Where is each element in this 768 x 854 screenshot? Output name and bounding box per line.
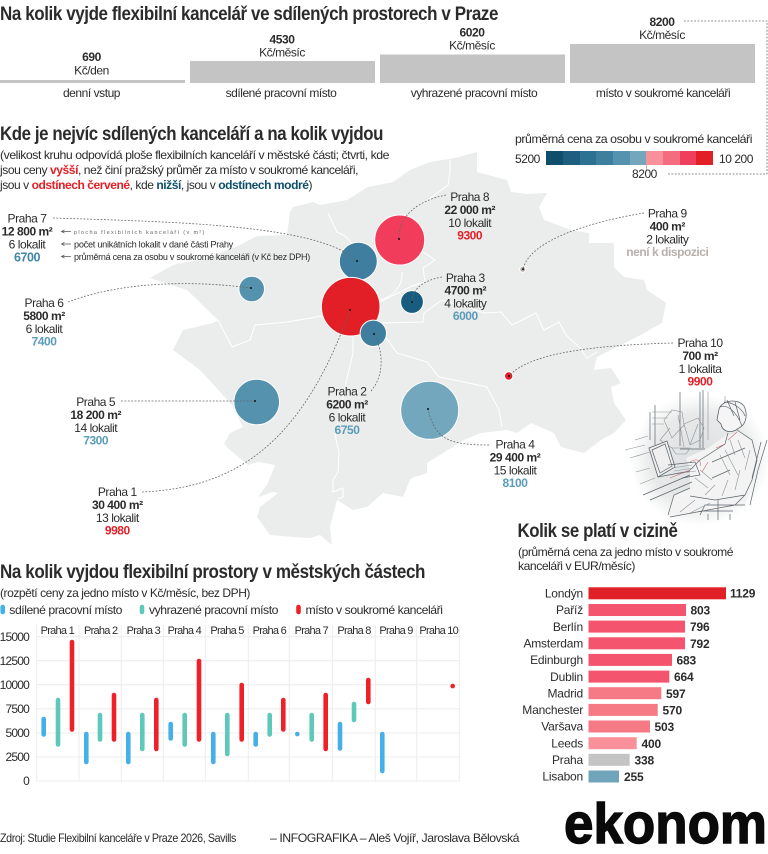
label: Praha 6: 7400 (32, 334, 57, 348)
map intro text: jsou ceny vyšší, než činí pražský průměr za místo v soukromé kanceláři, (0, 163, 358, 177)
bar chart: foreign prices: Edinburgh (530, 653, 583, 667)
bar chart: foreign prices: 400 (642, 737, 661, 751)
bar chart: foreign prices: 597 (666, 687, 686, 701)
window and plant (650, 390, 725, 454)
label: Praha 2: Praha 2 (328, 384, 367, 398)
column headers: Praha 9 (379, 625, 413, 637)
price comparison bars (0, 15, 755, 100)
label: Praha 7: 12 800 m² (2, 224, 53, 238)
label: Praha 4: Praha 4 (496, 438, 535, 452)
column headers: Praha 1 (41, 625, 75, 637)
heading: range chart: Na kolik vyjdou flexibilní prostory v městských částech (0, 562, 425, 583)
bar chart: foreign prices: 570 (662, 704, 682, 718)
y axis: 2500 (6, 750, 30, 764)
y axis: 15000 (0, 630, 30, 644)
bar chart: foreign prices: 503 (654, 720, 674, 734)
label: Praha 10: Praha 10 (677, 336, 723, 350)
bar chart: foreign prices: Varšava (541, 720, 584, 734)
bar chart: foreign prices: Madrid (548, 686, 583, 700)
column headers: Praha 6 (253, 625, 287, 637)
label: Praha 2: 6200 m² (326, 397, 368, 411)
chair (703, 440, 767, 520)
bar chart: foreign prices: 255 (624, 770, 644, 784)
grid (36, 625, 460, 781)
label: Praha 3: 4 lokality (444, 297, 487, 311)
column headers: Praha 10 (419, 625, 459, 637)
Praha 7 key annotations: plocha flexibilních kanceláří (v m²) (74, 230, 206, 236)
y axis: 10000 (0, 678, 30, 692)
label: Praha 1 (92, 485, 143, 538)
sdílené ranges (44, 719, 382, 771)
colour legend: průměrná cena za osobu v soukromé kanceláři (515, 132, 752, 146)
label: Praha 4 (490, 438, 541, 490)
column headers (41, 625, 459, 637)
bar: denní vstup: 690 (82, 50, 102, 64)
column headers: Praha 2 (84, 625, 118, 637)
heading: abroad: Kolik se platí v cizině (518, 521, 678, 542)
bar chart: foreign prices: 664 (674, 670, 694, 684)
label: Praha 10: 9900 (688, 374, 713, 388)
soukromé ranges (72, 642, 453, 749)
label: Praha 5: 7300 (83, 434, 109, 448)
colour legend (515, 132, 754, 181)
label: Praha 5: 18 200 m² (70, 408, 121, 422)
label: Praha 6 (23, 296, 65, 348)
label: Praha 10 (677, 336, 723, 388)
label: Praha 9: Praha 9 (648, 206, 688, 220)
label: Praha 5: 14 lokalit (74, 421, 118, 435)
heading: map: Kde je nejvíc sdílených kanceláří a na kolik vyjdou (0, 124, 383, 145)
label: Praha 5 (70, 395, 121, 448)
credits: – INFOGRAFIKA – Aleš Vojíř, Jaroslava Bělovská (270, 831, 520, 845)
desk (643, 475, 692, 500)
label: Praha 10: 700 m² (682, 349, 718, 363)
range chart legend (3, 603, 442, 617)
map intro text (0, 148, 390, 192)
column headers: Praha 5 (210, 625, 244, 637)
bar chart: foreign prices: Dublin (550, 670, 583, 684)
Praha 7 key annotations (62, 230, 310, 263)
bar: vyhrazené pracovní místo: vyhrazené pracovní místo (411, 86, 538, 100)
bar: vyhrazené pracovní místo: Kč/měsíc (449, 38, 495, 52)
column headers: Praha 8 (337, 625, 371, 637)
range chart legend: sdílené pracovní místo (9, 603, 123, 617)
bar: vyhrazené pracovní místo: 6020 (460, 26, 485, 40)
abroad note: (průměrná cena za jedno místo v soukromé (518, 545, 734, 559)
bar chart: foreign prices: Lisabon (542, 770, 583, 784)
label: Praha 7: 6700 (14, 250, 40, 264)
abroad note: kanceláři v EUR/měsíc) (518, 559, 635, 573)
bar: denní vstup: denní vstup (63, 86, 121, 100)
illustration: person working on a laptop (625, 390, 768, 526)
label: Praha 3: 6000 (453, 309, 479, 323)
label: Praha 7: Praha 7 (8, 212, 47, 226)
bar chart: foreign prices: Praha (552, 753, 584, 767)
label: Praha 2: 6 lokalit (329, 410, 366, 424)
label: Praha 4: 15 lokalit (494, 463, 538, 477)
bar chart: foreign prices: 803 (690, 604, 710, 618)
label: Praha 7 (2, 212, 53, 264)
range chart legend: vyhrazené pracovní místo (149, 603, 279, 617)
label: Praha 6: 5800 m² (23, 309, 65, 323)
range chart (0, 625, 460, 788)
abroad note (518, 545, 734, 573)
bar chart: foreign prices: 338 (634, 753, 654, 767)
y axis: 5000 (6, 726, 30, 740)
label: Praha 3: 4700 m² (445, 284, 487, 298)
bar: sdílené pracovní místo (190, 32, 375, 100)
bar: místo v soukromé kanceláři: Kč/měsíc (639, 28, 685, 42)
source line: Zdroj: Studie Flexibilní kanceláře v Praze 2026, Savills (0, 831, 236, 845)
label: Praha 10: 1 lokalita (679, 362, 722, 376)
colour legend: 5200 (515, 152, 541, 166)
label: Praha 8: 22 000 m² (444, 203, 495, 217)
colour legend: 8200 (632, 167, 658, 181)
bar chart: foreign prices: Berlín (553, 620, 583, 634)
map intro text: jsou v odstínech červené, kde nižší, jsou v odstínech modré) (0, 178, 312, 192)
range chart legend: místo v soukromé kanceláři (306, 603, 442, 617)
label: Praha 8 (444, 190, 495, 242)
bar chart: foreign prices: Manchester (522, 703, 583, 717)
y axis: 7500 (6, 702, 30, 716)
laptop (649, 441, 675, 477)
column headers: Praha 3 (127, 625, 161, 637)
range chart note: (rozpětí ceny za jedno místo v Kč/měsíc, bez DPH) (0, 586, 250, 600)
title: Na kolik vyjde flexibilní kancelář ve sdílených prostorech v Praze (0, 4, 498, 25)
bar chart: foreign prices: Amsterdam (523, 636, 583, 650)
bar: sdílené pracovní místo: sdílené pracovní místo (226, 86, 337, 100)
bar chart: foreign prices: Londýn (545, 586, 583, 600)
Praha 7 key annotations: průměrná cena za osobu v soukromé kanceláři (v Kč bez DPH) (74, 252, 310, 263)
bar chart: foreign prices: 683 (676, 654, 696, 668)
label: Praha 1: Praha 1 (98, 485, 138, 499)
bar chart: foreign prices: 792 (690, 637, 710, 651)
bar: místo v soukromé kanceláři: místo v soukromé kanceláři (596, 86, 730, 100)
label: Praha 4: 8100 (503, 476, 528, 490)
bar: místo v soukromé kanceláři (570, 15, 755, 100)
label: Praha 9 (626, 206, 708, 259)
label: Praha 9: není k dispozici (626, 245, 708, 259)
bar chart: foreign prices: Leeds (551, 736, 583, 750)
label: Praha 2 (326, 384, 368, 437)
bar: sdílené pracovní místo: 4530 (270, 32, 295, 46)
label: Praha 3 (444, 271, 487, 323)
y axis (0, 630, 30, 788)
bar chart: foreign prices: Paříž (556, 603, 583, 617)
map of Prague (150, 152, 666, 545)
bar chart: foreign prices (522, 586, 756, 784)
label: Praha 9: 2 lokality (646, 232, 689, 246)
label: Praha 3: Praha 3 (446, 271, 486, 285)
map intro text: (velikost kruhu odpovídá ploše flexibilních kanceláří v městské části; čtvrti, kde (0, 148, 390, 162)
label: Praha 1: 9980 (105, 524, 131, 538)
bar: denní vstup (0, 50, 185, 100)
y axis: 12500 (0, 654, 30, 668)
label: Praha 9: 400 m² (650, 219, 685, 233)
colour legend: 10 200 (719, 152, 754, 166)
label: Praha 8: Praha 8 (450, 190, 490, 204)
label: Praha 4: 29 400 m² (490, 450, 541, 464)
bar chart: foreign prices: 1129 (730, 586, 756, 600)
dotted connector 8200 (668, 21, 767, 174)
label: Praha 1: 30 400 m² (92, 498, 143, 512)
label: Praha 1: 13 lokalit (96, 511, 140, 525)
district boundaries (218, 160, 597, 499)
label: Praha 5: Praha 5 (76, 395, 116, 409)
leader lines (53, 195, 673, 492)
label: Praha 7: 6 lokalit (9, 238, 46, 252)
bar: vyhrazené pracovní místo (380, 26, 565, 100)
y axis: 0 (23, 774, 30, 788)
label: Praha 8: 10 lokalit (448, 216, 492, 230)
label: Praha 6: 6 lokalit (26, 322, 63, 336)
vyhrazené ranges (58, 700, 354, 754)
person (668, 432, 756, 515)
Praha 7 key annotations: počet unikátních lokalit v dané části Prahy (74, 240, 234, 250)
column headers: Praha 7 (295, 625, 329, 637)
bar: místo v soukromé kanceláři: 8200 (650, 15, 675, 29)
bubble centre dots (250, 238, 524, 410)
bubbles (234, 215, 526, 439)
label: Praha 8: 9300 (457, 228, 483, 242)
bar: denní vstup: Kč/den (74, 64, 109, 78)
bar: sdílené pracovní místo: Kč/měsíc (259, 46, 305, 60)
bar chart: foreign prices: 796 (690, 620, 710, 634)
label: Praha 6: Praha 6 (25, 296, 64, 310)
column headers: Praha 4 (168, 625, 202, 637)
label: Praha 2: 6750 (335, 423, 360, 437)
